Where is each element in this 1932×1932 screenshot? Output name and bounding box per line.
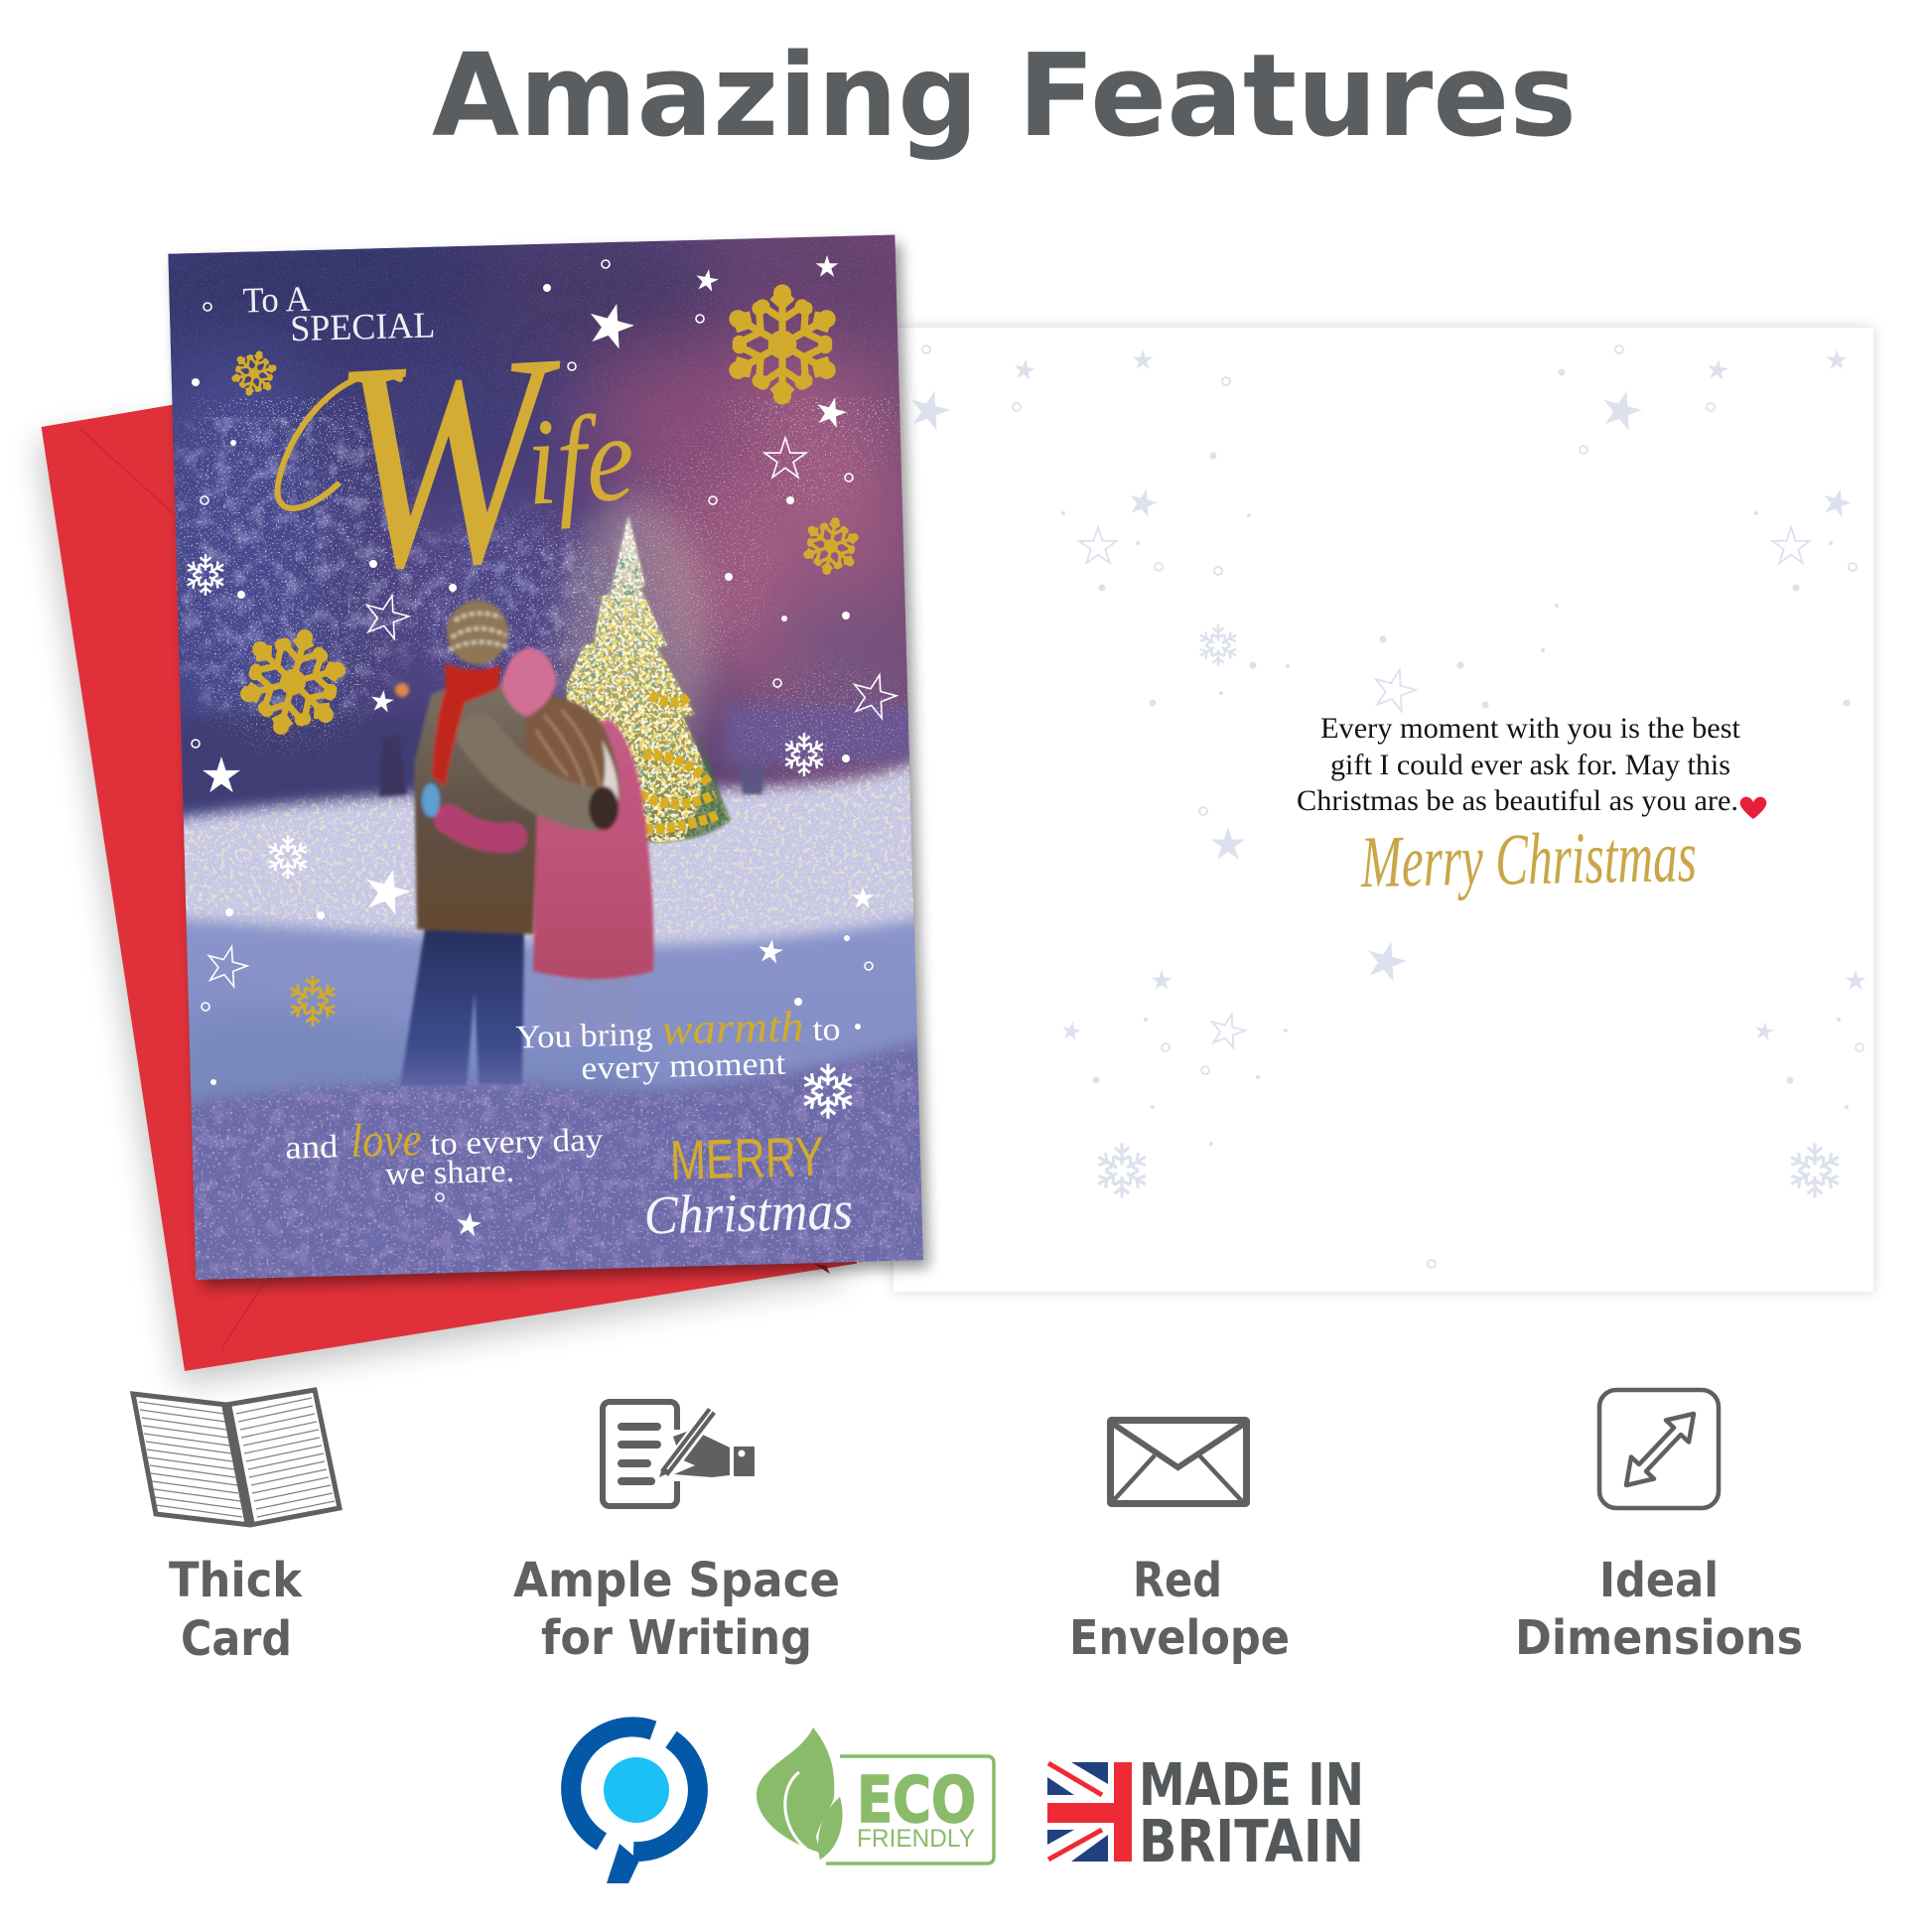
card message: You bring [515,1017,653,1056]
card message: to [812,1012,841,1048]
label: Thick [169,1553,303,1608]
logo: eco friendly: FRIENDLY [857,1825,975,1853]
label: Red [1133,1553,1222,1608]
card message: every moment [581,1046,786,1087]
feature: thick card [133,1390,340,1667]
feature: ample space [513,1402,840,1666]
card greeting: Merry: MERRY [669,1125,825,1191]
card heading: To A Special [242,275,436,350]
logo: eco friendly: ECO [857,1764,976,1838]
label: MADE IN [1139,1750,1364,1819]
card message [282,1001,844,1195]
label: Dimensions [1515,1610,1803,1666]
decorations: white snowflakes [185,554,856,1119]
icon: writing [603,1402,755,1506]
card message: and [285,1129,339,1167]
label [1515,1553,1803,1666]
inside script greeting: Merry Christmas [1359,816,1697,903]
label: for Writing [541,1610,812,1666]
feature: ideal dimensions [1515,1390,1803,1666]
icon: union flag [1047,1762,1132,1862]
inside greeting verse: Christmas be as beautiful as you are. [1297,784,1738,817]
label: Envelope [1069,1610,1290,1666]
decorations: white stars and dots [192,255,900,1237]
decorations: gold snowflakes [222,284,867,1027]
christmas tree [556,496,745,849]
card heading: To A Special: To A [242,279,311,320]
card message: we share. [385,1154,515,1192]
label [1139,1750,1364,1875]
card heading: To A Special: SPECIAL [290,305,436,349]
icon: open card [133,1390,340,1526]
label [513,1553,840,1666]
title: Amazing Features [432,30,1577,163]
label: Ample Space [513,1553,840,1608]
inside greeting verse: Every moment with you is the best [1320,712,1741,745]
envelope [38,402,874,1385]
card greeting: Christmas: Christmas [643,1179,854,1246]
icon: heart [1740,797,1766,819]
lower field [159,757,933,1291]
card message: warmth [661,1002,804,1054]
label: BRITAIN [1139,1807,1364,1875]
label [1069,1553,1290,1666]
logo: eco friendly [757,1727,994,1863]
card message: to every day [430,1122,604,1163]
label: Card [181,1611,292,1667]
distant figures and lamp [379,683,764,796]
card message: love [350,1113,422,1168]
card heading: Wife: W [328,291,577,632]
painted horizon [179,705,923,804]
logo: blue ring [571,1726,698,1883]
inside greeting verse: gift I could ever ask for. May this [1330,749,1730,781]
icon: dimensions [1599,1390,1719,1508]
label [169,1553,303,1667]
panel: card front [119,208,933,1291]
icon: envelope [1110,1420,1247,1503]
panel: card inside [894,328,1873,1292]
couple [400,601,653,1086]
inside greeting verse [1297,712,1741,817]
feature: red envelope [1069,1420,1290,1666]
label: Ideal [1599,1553,1719,1608]
card heading: Wife: ife [523,389,637,532]
logo: made in britain [1047,1750,1364,1875]
inside pattern: pale stars and snowflakes [905,345,1865,1268]
